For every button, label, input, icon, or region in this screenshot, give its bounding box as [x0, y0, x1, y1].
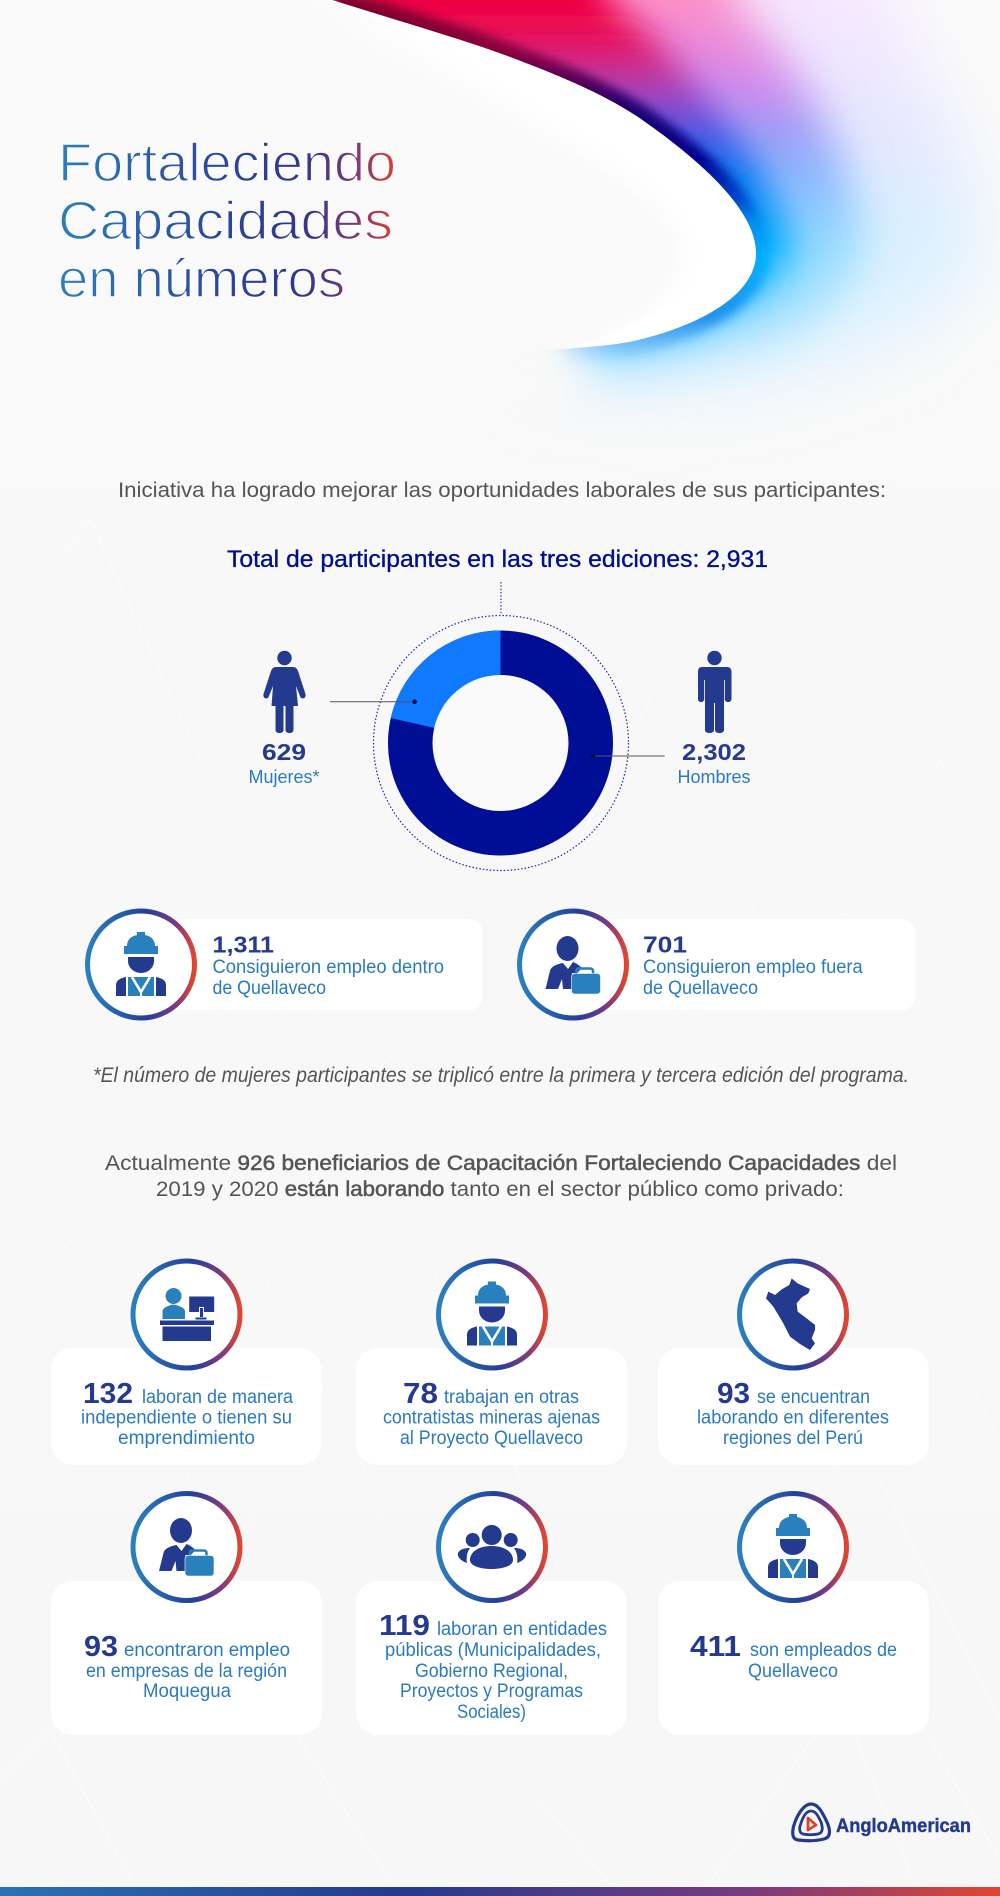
- card: 93 regions of Peru: regiones del Perú: [723, 1428, 863, 1449]
- card: 119 public entities: [356, 1494, 627, 1735]
- card: 119 public entities: Sociales): [457, 1702, 526, 1723]
- label: women count: Mujeres*: [248, 767, 320, 787]
- card: 132 independent: emprendimiento: [118, 1428, 255, 1449]
- card: 93 regions of Peru: [658, 1261, 929, 1465]
- title: [58, 133, 396, 309]
- card: 119 public entities: 119: [379, 1610, 430, 1642]
- card: 78 contractors: [356, 1261, 627, 1465]
- card: jobs inside Quellaveco: [88, 911, 482, 1018]
- card: jobs inside Quellaveco: 1,311: [212, 932, 274, 958]
- footer gradient bar: [0, 1887, 1000, 1896]
- card: 93 Moquegua: [51, 1494, 322, 1735]
- icon: person at desk: [160, 1288, 214, 1341]
- card: jobs outside Quellaveco: [520, 911, 915, 1018]
- card: 132 independent: independiente o tienen su: [81, 1408, 292, 1428]
- card: 93 Moquegua: encontraron empleo: [124, 1640, 290, 1661]
- card: jobs inside Quellaveco: Consiguieron empleo dentro: [212, 957, 444, 978]
- icon: group of people: [458, 1524, 526, 1569]
- card: 78 contractors: trabajan en otras: [444, 1387, 579, 1408]
- card: 78 contractors: al Proyecto Quellaveco: [400, 1428, 583, 1449]
- logo: Anglo American: AngloAmerican: [836, 1816, 971, 1837]
- card: 411 Quellaveco employees: 411: [690, 1631, 741, 1663]
- card: jobs outside Quellaveco: de Quellaveco: [643, 978, 758, 999]
- card: 119 public entities: laboran en entidades: [437, 1619, 607, 1640]
- footnote: *El número de mujeres participantes se triplicó entre la primera y tercera edición del programa.: [93, 1064, 909, 1087]
- title: Fortaleciendo: [58, 133, 396, 193]
- paragraph: current beneficiaries: 2019 y 2020 están laborando tanto en el sector público como privado:: [156, 1178, 844, 1201]
- label: men count: [678, 739, 750, 787]
- card: 132 independent: 132: [83, 1378, 133, 1410]
- icon: woman: [263, 651, 306, 733]
- label: men count: 2,302: [682, 739, 746, 765]
- card: 411 Quellaveco employees: son empleados de: [750, 1640, 897, 1661]
- intro text: Iniciativa ha logrado mejorar las oportunidades laborales de sus participantes:: [118, 479, 886, 502]
- paragraph: current beneficiaries: Actualmente 926 beneficiarios de Capacitación Fortaleciendo Capacidades del: [105, 1152, 897, 1175]
- card: 411 Quellaveco employees: [658, 1494, 929, 1735]
- label: women count: [248, 739, 320, 787]
- card: 93 regions of Peru: se encuentran: [757, 1387, 870, 1408]
- card: 119 public entities: Gobierno Regional,: [415, 1661, 568, 1682]
- card: 411 Quellaveco employees: Quellaveco: [748, 1661, 838, 1682]
- card: 119 public entities: Proyectos y Programas: [400, 1681, 583, 1702]
- icon: map of Peru: [766, 1278, 815, 1350]
- heading: total participants: Total de participantes en las tres ediciones: 2,931: [227, 546, 768, 573]
- card: 93 Moquegua: en empresas de la región: [86, 1661, 287, 1682]
- title: en números: [58, 249, 345, 309]
- label: women count: 629: [262, 739, 306, 765]
- card: 78 contractors: contratistas mineras ajenas: [383, 1408, 600, 1428]
- donut chart: participants by gender: [330, 582, 665, 870]
- icon: man: [698, 651, 732, 733]
- card: jobs outside Quellaveco: Consiguieron empleo fuera: [643, 957, 863, 978]
- label: men count: Hombres: [678, 767, 750, 787]
- card: 132 independent: [51, 1261, 322, 1465]
- card: 93 Moquegua: Moquegua: [143, 1681, 231, 1702]
- card: 78 contractors: 78: [403, 1378, 438, 1410]
- swoosh: hero gradient ribbon: [285, 0, 975, 398]
- card: 93 Moquegua: 93: [84, 1631, 118, 1663]
- card: 132 independent: laboran de manera: [142, 1387, 293, 1408]
- title: Capacidades: [58, 191, 393, 251]
- card: jobs inside Quellaveco: de Quellaveco: [212, 978, 326, 999]
- card: 119 public entities: públicas (Municipalidades,: [385, 1640, 601, 1661]
- logo: Anglo American: [793, 1804, 971, 1841]
- card: 93 regions of Peru: laborando en diferentes: [697, 1408, 889, 1428]
- paragraph: current beneficiaries: [105, 1152, 897, 1201]
- card: 93 regions of Peru: 93: [717, 1378, 750, 1410]
- card: jobs outside Quellaveco: 701: [643, 932, 687, 958]
